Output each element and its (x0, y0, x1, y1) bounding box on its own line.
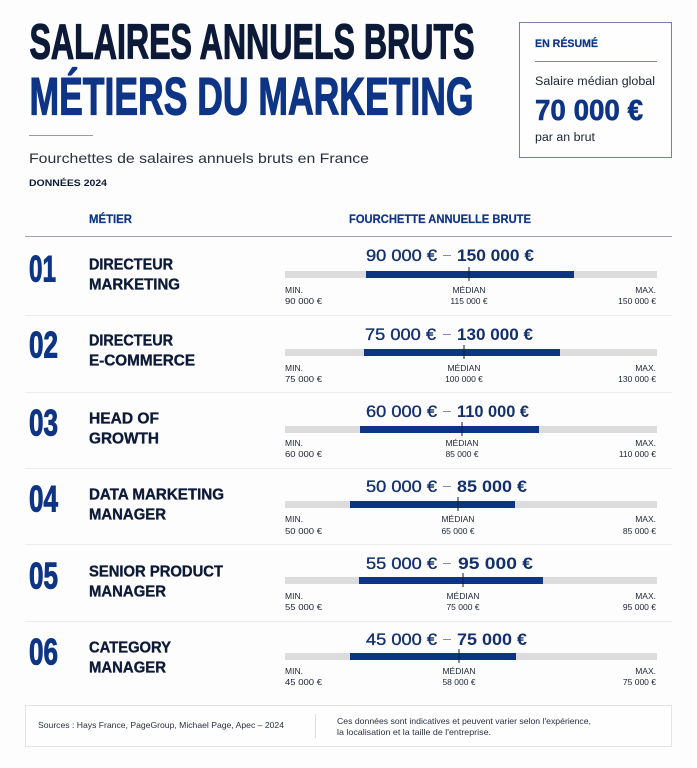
row 02: 130 000 € (457, 325, 534, 344)
row 01: MIN. (285, 285, 303, 295)
row 06: 45 000 € (366, 630, 438, 649)
row 01: DIRECTEUR (89, 256, 173, 274)
row 06: 75 000 € (623, 677, 656, 687)
row 05: 75 000 € (446, 602, 480, 612)
row 06: 45 000 € (285, 677, 322, 687)
panel: sources footer (26, 706, 672, 746)
panel: summary (520, 22, 672, 158)
panel: summary: par an brut (535, 132, 596, 144)
row 04 (29, 477, 657, 536)
row 04: MAX. (635, 514, 656, 524)
row 05: 95 000 € (623, 602, 656, 612)
row 01: 01 (29, 248, 56, 290)
row 02: E-COMMERCE (89, 352, 195, 370)
row 06: MANAGER (89, 660, 166, 676)
row 03: 110 000 € (457, 402, 530, 421)
row 03: 85 000 € (445, 449, 479, 459)
row 01: MÉDIAN (452, 285, 486, 295)
row 02: 130 000 € (618, 374, 656, 384)
row 05: 05 (29, 556, 58, 596)
row 05: MIN. (285, 591, 303, 601)
title (30, 16, 474, 126)
row 02: DIRECTEUR (89, 332, 173, 350)
row 03: HEAD OF (89, 410, 159, 428)
title: MÉTIERS DU MARKETING (30, 66, 474, 126)
table header (25, 213, 672, 237)
row 01: 90 000 € (285, 296, 322, 306)
row 04: MANAGER (89, 506, 166, 524)
row 01: 150 000 € (618, 296, 656, 306)
row 04: 85 000 € (623, 526, 656, 536)
row 01: MARKETING (89, 276, 180, 294)
table header: MÉTIER (89, 213, 133, 226)
row 02: 100 000 € (445, 374, 483, 384)
row 02: MÉDIAN (447, 363, 481, 373)
row 02: MIN. (285, 363, 303, 373)
row 02 (29, 324, 657, 384)
row 01: 90 000 € (366, 246, 438, 265)
row 01 (29, 246, 657, 306)
row 06: 06 (29, 632, 58, 672)
table header: FOURCHETTE ANNUELLE BRUTE (349, 214, 531, 226)
row 03 (29, 402, 657, 459)
row 03: 03 (29, 402, 58, 444)
row 05: 55 000 € (285, 602, 322, 612)
row 04: MÉDIAN (441, 514, 475, 524)
row 03: MÉDIAN (445, 438, 479, 448)
row 04: 65 000 € (441, 526, 475, 536)
row 05: SENIOR PRODUCT (89, 564, 224, 580)
row 03: 60 000 € (285, 449, 322, 459)
row 05: MANAGER (89, 584, 166, 600)
row 02: MAX. (635, 363, 656, 373)
row 03: GROWTH (89, 430, 159, 448)
row 04: 04 (29, 478, 58, 520)
panel: summary: EN RÉSUMÉ (535, 37, 598, 50)
row 04: 85 000 € (457, 477, 528, 496)
row 06: MAX. (635, 666, 656, 676)
panel: sources footer: Ces données sont indicatives et peuvent varier selon l'expérience, (337, 716, 591, 726)
row 01: 115 000 € (450, 296, 488, 306)
row 06: 75 000 € (457, 630, 528, 649)
row 05 (29, 554, 657, 612)
row 02: 75 000 € (365, 325, 437, 344)
row 03: MAX. (635, 438, 656, 448)
subtitle: Fourchettes de salaires annuels bruts en France (29, 150, 369, 166)
row 05: MÉDIAN (446, 591, 480, 601)
row 02: 02 (29, 324, 58, 366)
panel: sources footer: la localisation et la taille de l'entreprise. (337, 727, 491, 737)
row 04: MIN. (285, 514, 303, 524)
row 03: MIN. (285, 438, 303, 448)
row 03: 60 000 € (366, 402, 438, 421)
panel: sources footer: Sources : Hays France, PageGroup, Michael Page, Apec – 2024 (38, 720, 284, 730)
row 04: DATA MARKETING (89, 486, 224, 504)
row 01: 150 000 € (457, 246, 535, 265)
row 06: MIN. (285, 666, 303, 676)
data year: DONNÉES 2024 (29, 178, 108, 189)
row 01: MAX. (635, 285, 656, 295)
row 03: 110 000 € (619, 449, 656, 459)
row 06: 58 000 € (442, 677, 476, 687)
row 02: 75 000 € (285, 374, 322, 384)
row 05: 55 000 € (366, 554, 438, 573)
panel: summary: 70 000 € (535, 95, 643, 127)
row 04: 50 000 € (366, 477, 438, 496)
title: SALAIRES ANNUELS BRUTS (30, 16, 474, 70)
row 04: 50 000 € (285, 526, 322, 536)
row 06 (29, 630, 657, 687)
row 06: MÉDIAN (442, 666, 476, 676)
row 05: MAX. (635, 591, 656, 601)
row 06: CATEGORY (89, 640, 172, 656)
panel: summary: Salaire médian global (535, 76, 655, 88)
row 05: 95 000 € (458, 554, 534, 573)
